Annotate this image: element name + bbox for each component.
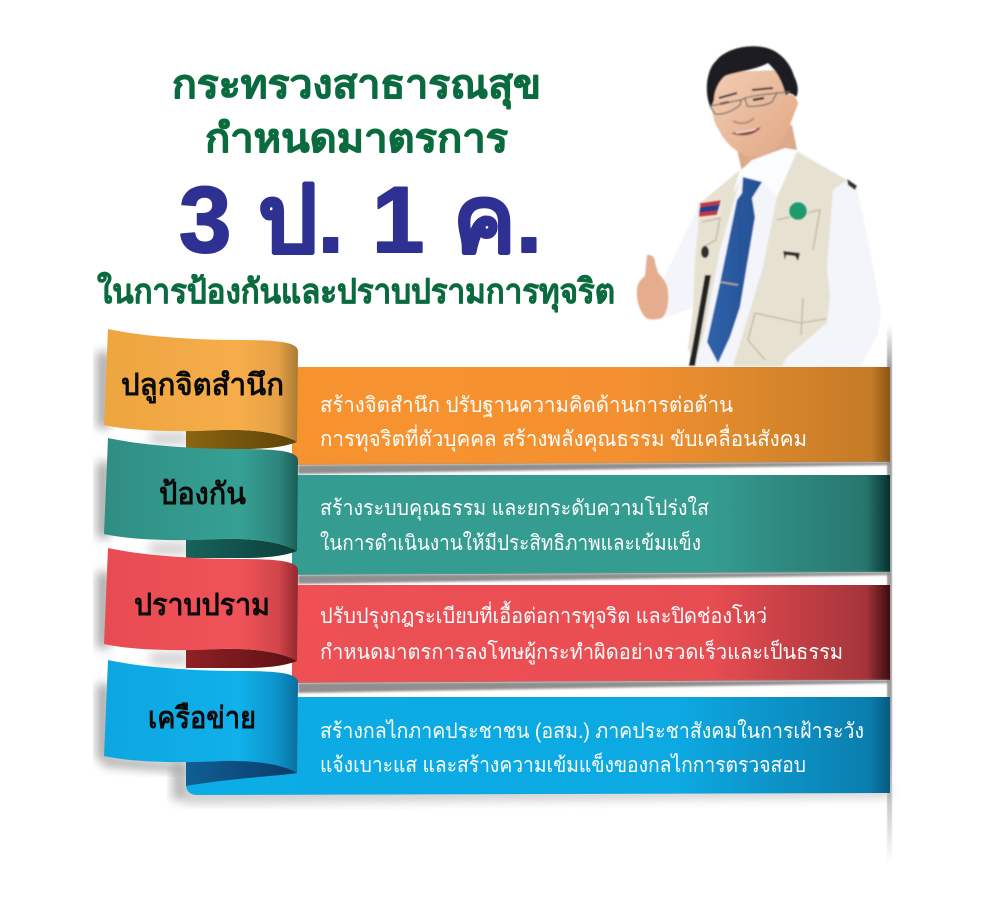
ribbon: blue bbox=[104, 660, 298, 773]
ribbon: orange bbox=[104, 329, 298, 442]
red bar text bbox=[320, 601, 843, 665]
pen pocket bbox=[783, 251, 800, 261]
ribbon: teal bbox=[104, 438, 298, 551]
green badge bbox=[788, 202, 808, 220]
fold: teal bbox=[186, 539, 297, 558]
nose shadow bbox=[733, 118, 754, 123]
teal bar text bbox=[320, 496, 709, 555]
ribbon label: ปราบปราม: ปราบปราม bbox=[134, 589, 270, 622]
ribbon: red bbox=[104, 548, 298, 661]
title bbox=[97, 63, 615, 313]
vest shadows and pockets bbox=[702, 210, 826, 360]
orange line 1: สร้างจิตสำนึก ปรับฐานความคิดด้านการต่อต้าน bbox=[320, 394, 733, 417]
person photo bbox=[637, 46, 881, 367]
title line 1: กระทรวงสาธารณสุข bbox=[172, 63, 541, 110]
orange bar text bbox=[320, 394, 807, 452]
flag patch bbox=[697, 199, 722, 219]
teal line 1: สร้างระบบคุณธรรม และยกระดับความโปร่งใส bbox=[320, 496, 709, 521]
neck bbox=[735, 125, 797, 175]
bar shadow: teal bbox=[298, 572, 890, 584]
eyes bbox=[720, 98, 764, 104]
bar shadow: orange bbox=[298, 462, 890, 474]
subtitle: ในการป้องกันและปราบปรามการทุจริต bbox=[97, 271, 615, 313]
headline 3 ป. 1 ค.: ป. bbox=[258, 167, 344, 272]
ribbon label: เครือข่าย: เครือข่าย bbox=[148, 702, 256, 735]
vest right panel bbox=[733, 152, 847, 366]
eyebrows bbox=[719, 88, 773, 98]
fold: red bbox=[186, 649, 297, 668]
bar shadow: red bbox=[298, 680, 890, 693]
face bbox=[711, 70, 798, 157]
panel: blue bar bbox=[186, 697, 890, 795]
fold: blue bbox=[186, 760, 297, 786]
shoulder dark patch bbox=[847, 179, 857, 190]
vest left panel bbox=[688, 170, 740, 365]
ribbon label: ปลูกจิตสำนึก: ปลูกจิตสำนึก bbox=[121, 369, 284, 404]
hair bbox=[707, 46, 798, 108]
right edge shadow bbox=[887, 325, 892, 863]
panel: red bar bbox=[292, 585, 890, 683]
headline 3 ป. 1 ค.: ค. bbox=[453, 167, 542, 272]
phone strap bbox=[689, 275, 711, 366]
left ribbon shadows bbox=[97, 352, 890, 804]
orange line 2: การทุจริตที่ตัวบุคคล สร้างพลังคุณธรรม ขับเคลื่อนสังคม bbox=[320, 424, 807, 452]
panel: orange bar bbox=[292, 367, 890, 465]
red line 2: กำหนดมาตรการลงโทษผู้กระทำผิดอย่างรวดเร็วและเป็นธรรม bbox=[320, 638, 843, 665]
tie clip bbox=[720, 282, 738, 285]
red line 1: ปรับปรุงกฎระเบียบที่เอื้อต่อการทุจริต และปิดช่องโหว่ bbox=[320, 601, 767, 629]
collar bbox=[733, 148, 797, 197]
blue bar text bbox=[320, 719, 864, 777]
blue line 2: แจ้งเบาะแส และสร้างความเข้มแข็งของกลไกการตรวจสอบ bbox=[320, 751, 806, 777]
shirt and arms bbox=[658, 150, 881, 367]
panel: teal bar bbox=[292, 475, 890, 575]
glasses bbox=[710, 92, 790, 114]
fold: orange bbox=[186, 430, 297, 449]
teal line 2: ในการดำเนินงานให้มีประสิทธิภาพและเข้มแข็ง bbox=[320, 529, 701, 555]
vest hook bbox=[701, 246, 709, 258]
thumbs up hand bbox=[637, 255, 668, 320]
tie bbox=[707, 177, 762, 363]
ribbon label: ป้องกัน: ป้องกัน bbox=[159, 478, 246, 511]
mouth bbox=[731, 127, 761, 135]
headline 3 ป. 1 ค.: 3 bbox=[179, 167, 231, 272]
headline 3 ป. 1 ค.: 1 bbox=[372, 167, 424, 272]
title line 2: กำหนดมาตรการ bbox=[205, 117, 509, 161]
blue line 1: สร้างกลไกภาคประชาชน (อสม.) ภาคประชาสังคมในการเฝ้าระวัง bbox=[320, 719, 864, 743]
